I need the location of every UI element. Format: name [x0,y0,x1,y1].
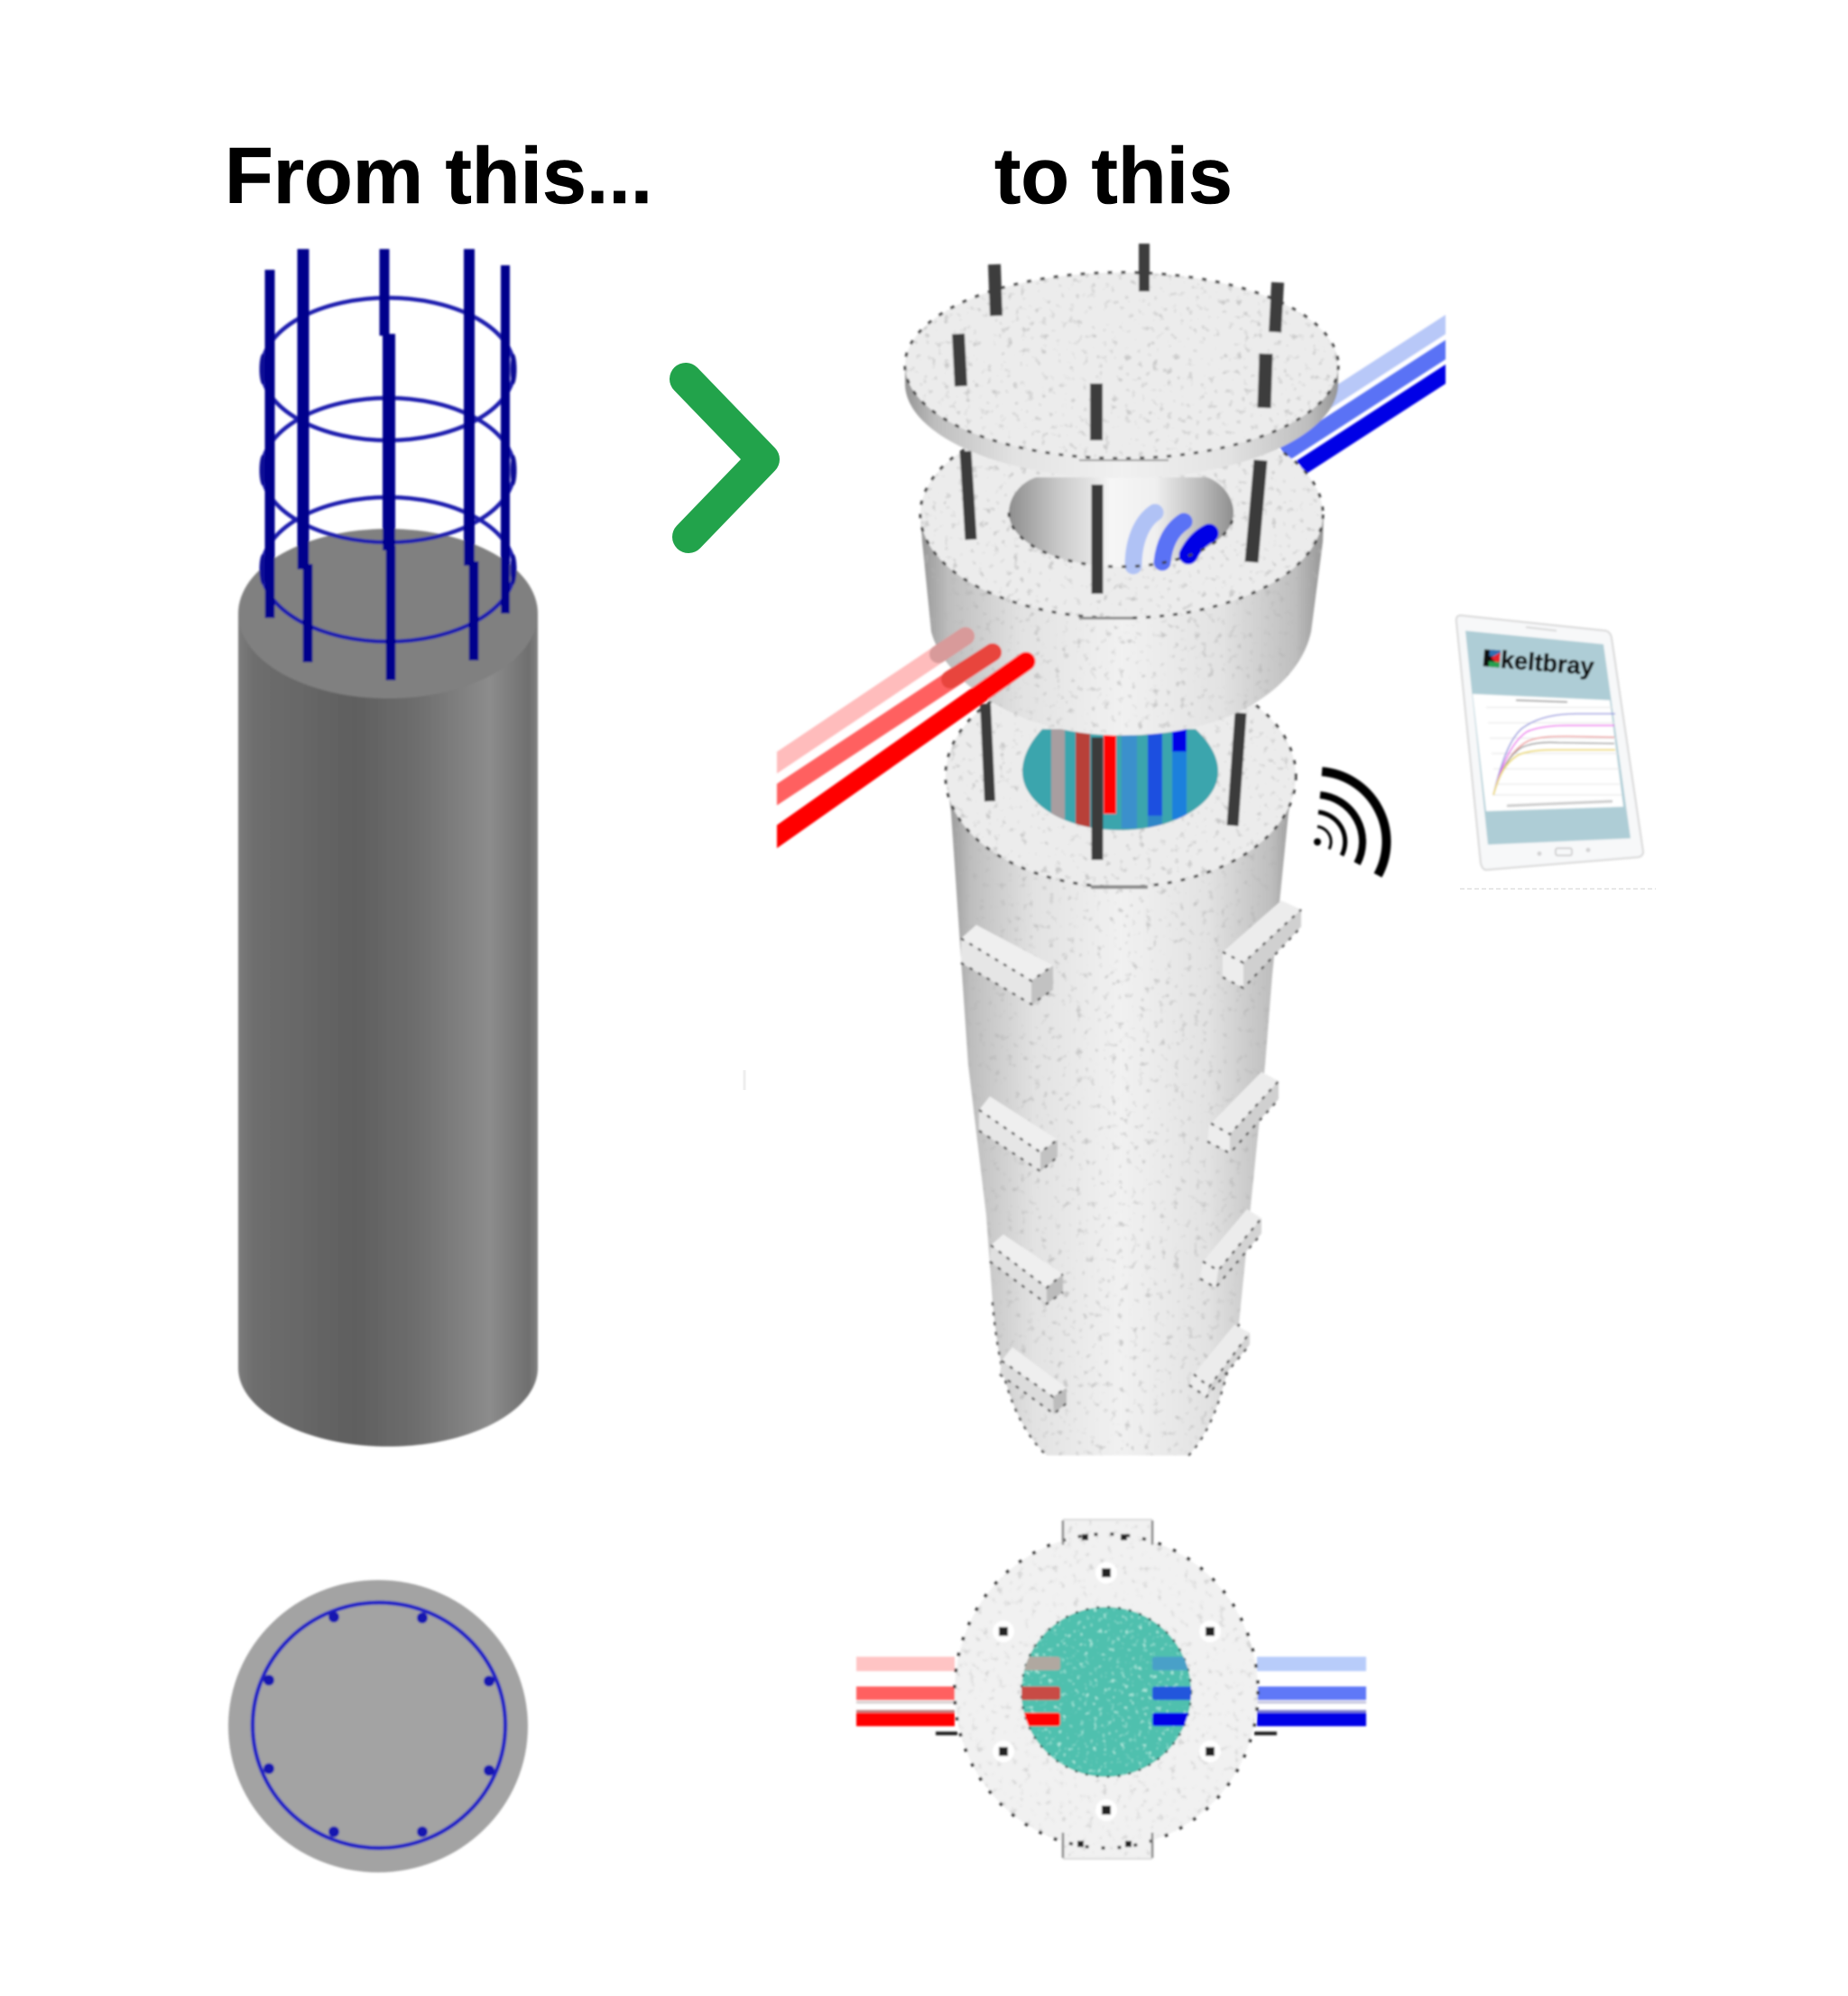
panel: energy pile, cross-section [856,1517,1366,1862]
chart [1473,694,1623,811]
tablet buttons [1526,627,1590,855]
logo and wordmark: keltbray [1500,646,1595,680]
tablet with monitoring chart [1456,615,1643,870]
lower pile body [938,663,1299,1462]
red pipes [749,636,1026,856]
reinforcement ring with bars [253,1603,505,1848]
rebar: lower section [985,704,1241,860]
rebar cage [260,249,516,680]
concrete cylinder [238,529,538,1446]
fin: left 3 [990,1234,1063,1304]
panel: conventional pile, cross-section [228,1580,528,1872]
section concrete and fins [951,1518,1261,1861]
fin: right 3 [1200,1209,1261,1288]
grout core with pipe stubs [1017,1603,1197,1783]
tablet screen [1465,631,1631,845]
title: From this: From this... [225,131,652,220]
pipes: blue side [1257,1657,1366,1726]
concrete section [228,1580,528,1872]
rebar: middle section [966,451,1261,594]
blue pipes [1280,314,1447,474]
panel: conventional pile, 3D view [238,249,538,1446]
top disc [902,266,1344,478]
panel: energy pile, 3D view [749,244,1480,1462]
title: to this: to this [994,131,1233,220]
fin: right 4 [1189,1325,1250,1397]
fin: left 1 [961,925,1053,1004]
rebar: top ends [958,244,1278,440]
fin: left 2 [979,1096,1058,1171]
icon: wireless signal [1314,772,1386,875]
grout core with pipes [1022,729,1218,830]
void in middle segment [1009,477,1234,567]
fin: right 2 [1207,1072,1279,1153]
middle pile segment [918,448,1326,738]
pipes: red side [856,1657,955,1726]
arrow: green chevron [686,379,763,537]
tablet body [1456,615,1643,870]
fin: right 1 [1223,901,1301,988]
rebar dots and markers [936,1534,1277,1847]
fin: left 4 [1000,1347,1067,1414]
infographic: from this to this [227,144,1656,1873]
